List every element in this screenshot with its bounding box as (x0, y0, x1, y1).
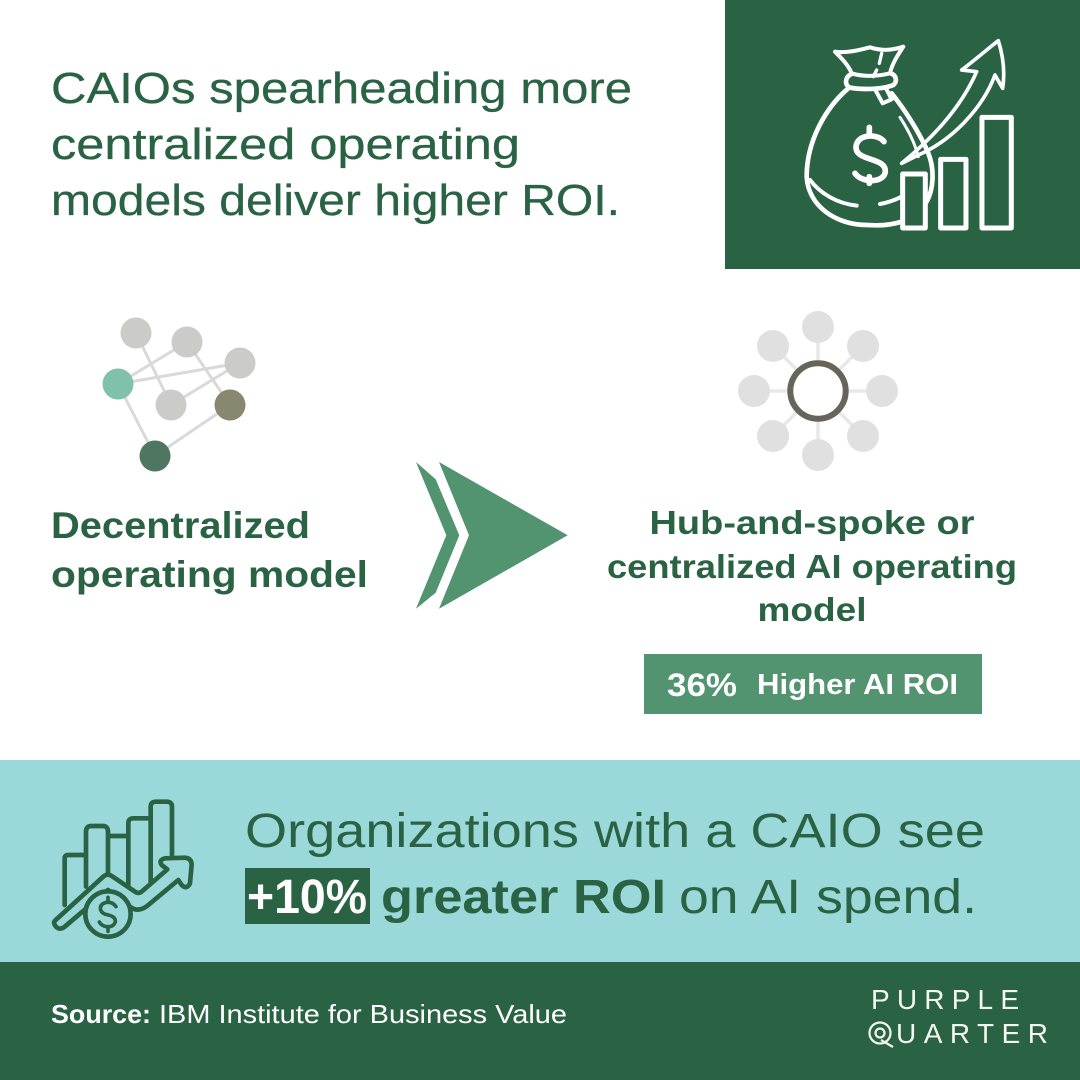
arrow: chevron (416, 462, 568, 609)
text: source: Source: (51, 999, 151, 1029)
callout: 36% higher AI ROI (644, 654, 982, 714)
heading: centralized model: model (758, 591, 866, 628)
text: CAIO ROI statement: greater ROI (381, 870, 666, 924)
panel: footer (0, 962, 1080, 1080)
heading: centralized model: Hub-and-spoke or (650, 504, 975, 541)
icon: decentralized network (102, 318, 256, 472)
logo: Purple Quarter: PURPLE (871, 984, 1019, 1015)
title: CAIOs spearheading more (51, 64, 632, 113)
title: models deliver higher ROI. (51, 176, 620, 225)
icon: hub and spoke (738, 311, 898, 471)
highlight: +10%: +10% (247, 871, 367, 924)
text: source: IBM Institute for Business Value (159, 999, 567, 1029)
callout: 36% higher AI ROI: 36% (667, 667, 737, 703)
heading: centralized model: centralized AI operating (607, 548, 1017, 585)
heading: decentralized model: operating model (51, 554, 368, 595)
title: centralized operating (51, 120, 520, 169)
icon: logo at-sign Q (870, 1022, 893, 1047)
title (51, 64, 632, 225)
callout: 36% higher AI ROI: Higher AI ROI (757, 669, 958, 701)
text: CAIO ROI statement: Organizations with a CAIO see (245, 804, 985, 858)
text: CAIO ROI statement: on AI spend. (679, 870, 977, 924)
panel: CAIO ROI banner (0, 760, 1080, 962)
logo: Purple Quarter (870, 984, 1048, 1049)
heading: decentralized model (51, 505, 368, 595)
heading: decentralized model: Decentralized (51, 505, 310, 546)
icon: bar chart with arrow and dollar (54, 802, 192, 937)
text: CAIO ROI statement (245, 804, 985, 924)
heading: centralized model (607, 504, 1017, 628)
panel: money bag icon (725, 0, 1080, 269)
icon: dollar sign (855, 127, 885, 183)
logo: Purple Quarter: UARTER (896, 1018, 1048, 1049)
icon: money bag and growth chart (807, 41, 1011, 228)
